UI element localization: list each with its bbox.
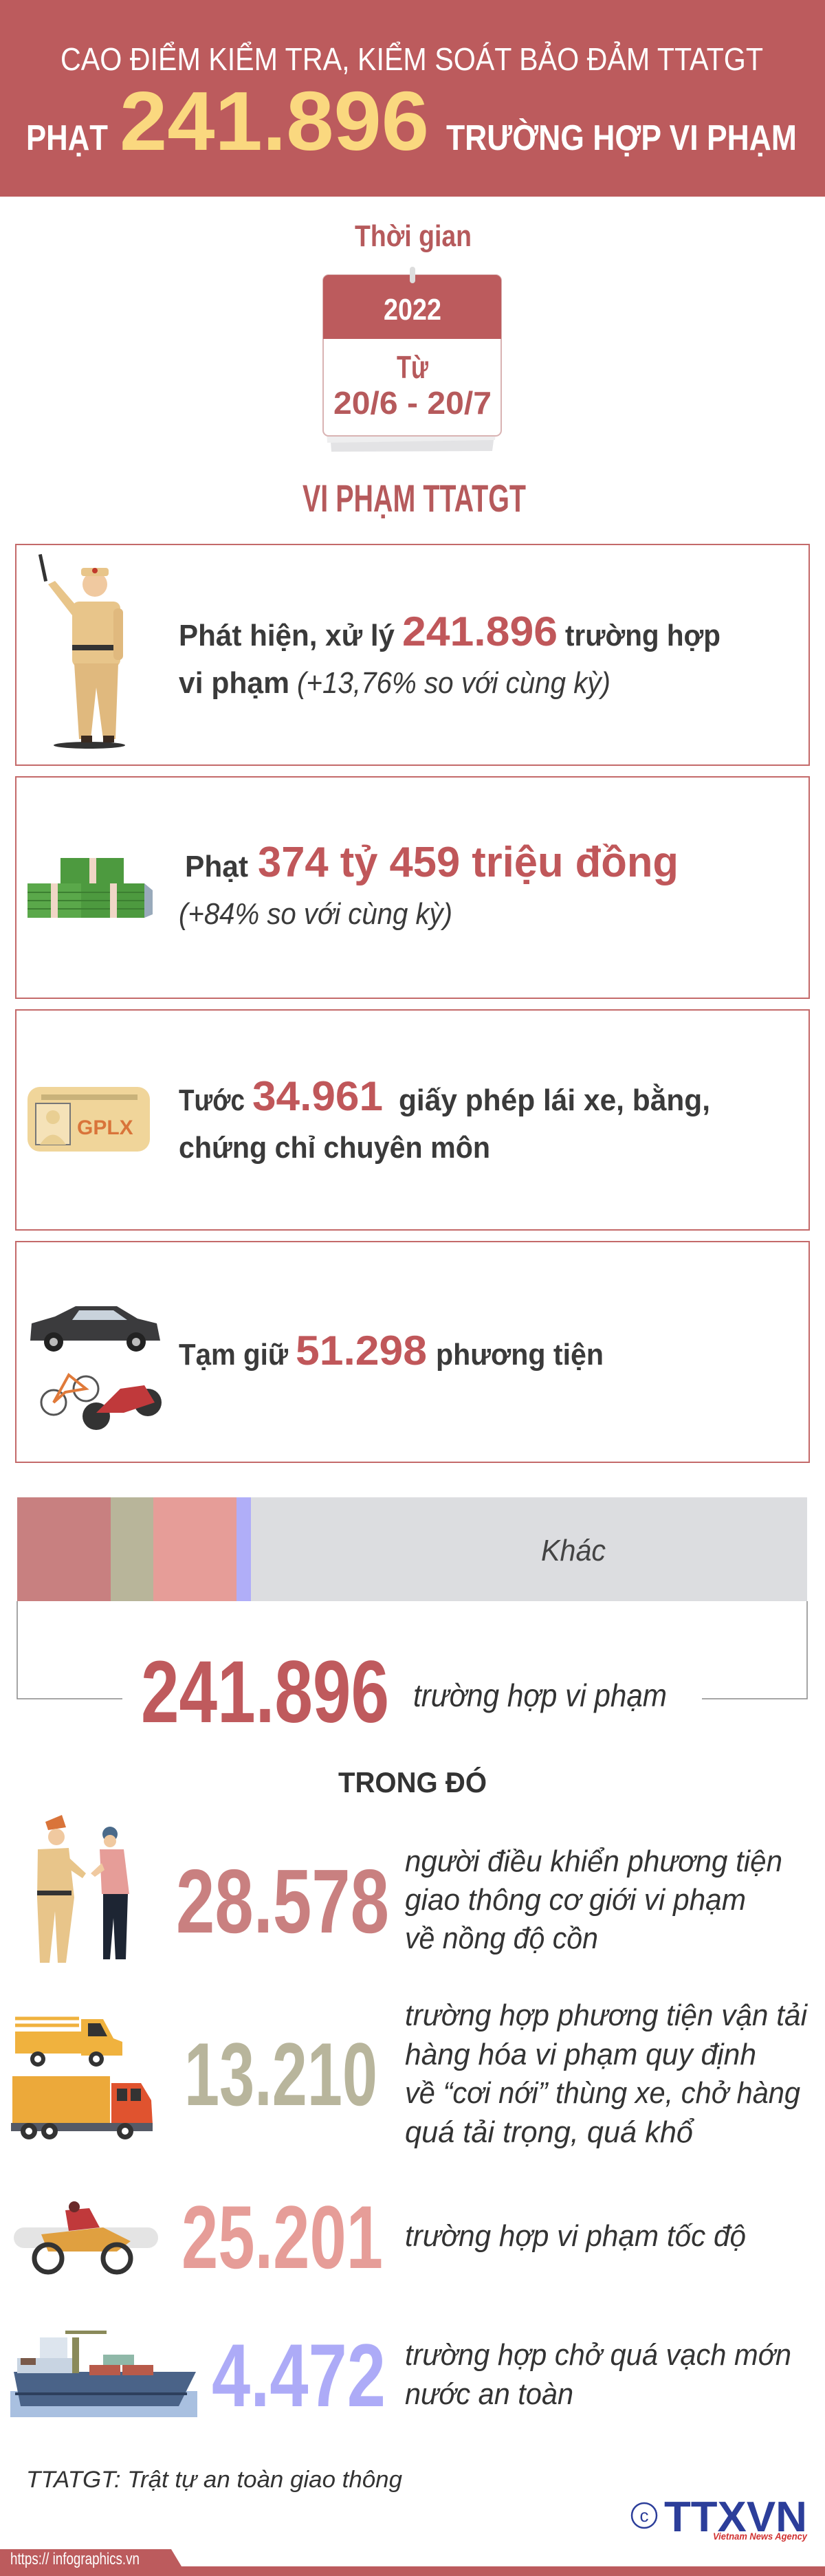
icon: GPLX card	[28, 1087, 150, 1152]
icon: traffic policeman	[38, 554, 125, 749]
logo: TTXVN: TTXVN	[664, 2494, 807, 2541]
calendar: 20/6 - 20/7	[333, 385, 492, 421]
item: trucks: hàng hóa vi phạm quy định	[405, 2038, 756, 2071]
item: speeding: trường hợp vi phạm tốc độ	[405, 2219, 746, 2253]
title line 1: CAO ĐIỂM KIỂM TRA, KIỂM SOÁT BẢO ĐẢM TTATGT	[60, 41, 763, 77]
panel: detected violations: vi phạm	[179, 666, 289, 700]
calendar: Từ	[397, 349, 429, 385]
calendar	[323, 267, 501, 452]
item: ship: trường hợp chở quá vạch mớn	[405, 2338, 791, 2372]
text: vehicles: Tạm giữ	[179, 1338, 288, 1372]
text: licenses: giấy phép lái xe, bằng,	[399, 1083, 710, 1117]
icon: speeding motorbike	[14, 2201, 158, 2272]
logo: TTXVN: Vietnam News Agency	[713, 2531, 808, 2542]
title line 2: PHẠT	[26, 118, 108, 158]
panel: detected violations	[16, 544, 809, 765]
item: speeding: 25.201	[182, 2187, 383, 2287]
item: ship	[10, 2325, 791, 2425]
item: trucks: về “cơi nới” thùng xe, chở hàng	[405, 2076, 801, 2110]
title line 2	[26, 74, 797, 168]
panel: detected violations: (+13,76% so với cùng kỳ)	[297, 666, 610, 700]
logo: TTXVN: c	[639, 2505, 649, 2526]
text: detected: trường hợp	[565, 619, 720, 652]
text: vehicles: phương tiện	[436, 1338, 604, 1372]
heading: TRONG ĐÓ: TRONG ĐÓ	[338, 1765, 487, 1798]
item: alcohol: về nồng độ cồn	[405, 1922, 598, 1955]
item: alcohol: 28.578	[176, 1851, 389, 1952]
text: licenses: Tước	[179, 1083, 245, 1117]
icon: police and driver	[37, 1815, 129, 1963]
text: detected: 241.896	[402, 608, 558, 654]
icon: money stacks	[28, 858, 153, 918]
total cases	[141, 1643, 667, 1741]
icon: car and bikes	[30, 1306, 162, 1430]
item: trucks	[11, 1999, 808, 2149]
text: detected: Phát hiện, xử lý	[179, 619, 395, 652]
panel: fines	[16, 777, 809, 998]
footnote: TTATGT: Trật tự an toàn giao thông	[26, 2467, 402, 2493]
item: alcohol	[37, 1815, 782, 1963]
icon: cargo ship	[10, 2331, 197, 2417]
icon: trucks	[11, 2018, 153, 2139]
heading: VI PHẠM TTATGT: VI PHẠM TTATGT	[302, 476, 526, 520]
panel: licenses: chứng chỉ chuyên môn	[179, 1131, 490, 1165]
item: alcohol: giao thông cơ giới vi phạm	[405, 1883, 746, 1917]
panel: fines: (+84% so với cùng kỳ)	[179, 897, 452, 931]
icon: GPLX card: GPLX	[77, 1116, 133, 1139]
header banner	[0, 0, 825, 197]
item: trucks: trường hợp phương tiện vận tải	[405, 1999, 808, 2032]
title line 2: 241.896	[120, 74, 429, 168]
panel: vehicles seized	[16, 1242, 809, 1462]
item: trucks: quá tải trọng, quá khổ	[405, 2115, 694, 2149]
footer	[0, 2549, 825, 2576]
panel: licenses	[16, 1010, 809, 1230]
label: Khác: Khác	[541, 1534, 606, 1567]
text: fines: Phạt	[185, 850, 248, 883]
item: alcohol: người điều khiển phương tiện	[405, 1845, 782, 1878]
text: vehicles: 51.298	[296, 1328, 427, 1374]
heading: time: Thời gian	[355, 219, 472, 253]
footer: https:// infographics.vn	[10, 2550, 140, 2568]
item: speeding	[14, 2187, 746, 2287]
stacked bar chart	[17, 1497, 807, 1601]
text: licenses: 34.961	[252, 1073, 383, 1119]
item: ship: 4.472	[212, 2325, 386, 2425]
total cases: 241.896	[141, 1643, 389, 1741]
text: fines: 374 tỷ 459 triệu đồng	[258, 839, 679, 886]
item: trucks: 13.210	[184, 2024, 377, 2124]
calendar: 2022	[384, 293, 441, 327]
item: ship: nước an toàn	[405, 2377, 573, 2411]
total cases: trường hợp vi phạm	[413, 1677, 667, 1713]
